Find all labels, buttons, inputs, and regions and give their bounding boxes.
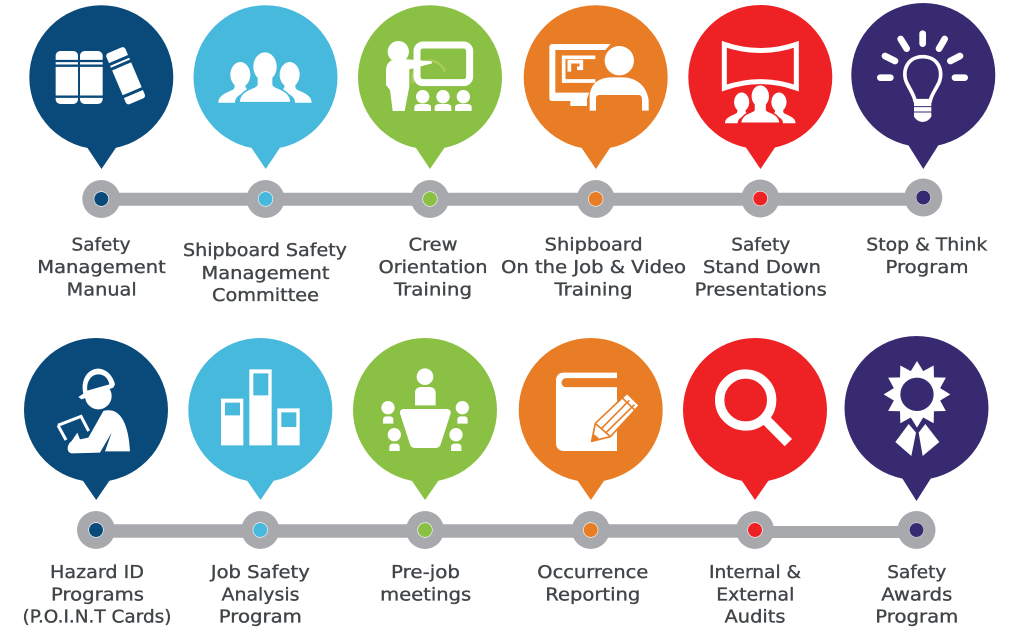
panel: Safety Management Manual <box>29 5 173 301</box>
icon: trainer at board <box>386 41 472 111</box>
timeline node <box>898 511 936 549</box>
timeline node <box>577 180 615 218</box>
pin <box>844 336 988 501</box>
icon: books <box>53 46 147 106</box>
label <box>378 234 488 300</box>
label: Orientation <box>378 257 488 278</box>
label: Awards <box>881 584 952 606</box>
icon: worker with tablet <box>58 369 130 453</box>
label: Job Safety <box>210 562 310 583</box>
label: Shipboard Safety <box>183 240 347 261</box>
label: On the Job & Video <box>501 257 686 278</box>
panel: Occurrence Reporting <box>519 338 663 606</box>
timeline node <box>77 511 115 549</box>
pin <box>688 5 832 169</box>
icon: award rosette <box>884 361 950 456</box>
icon: notebook and pencil <box>556 373 639 451</box>
timeline node <box>406 511 444 549</box>
pin <box>358 5 502 169</box>
label: Program <box>886 257 968 278</box>
pin <box>194 5 338 169</box>
label: Audits <box>724 606 786 628</box>
panel: Crew Orientation Training <box>358 5 502 301</box>
timeline node <box>246 180 284 218</box>
label <box>537 562 648 606</box>
icon: video training <box>549 44 649 111</box>
label <box>709 562 801 628</box>
pin <box>29 5 173 169</box>
timeline node <box>411 180 449 218</box>
label <box>210 562 310 628</box>
label: Program <box>219 606 302 628</box>
timeline node <box>82 180 120 218</box>
pin <box>24 338 168 500</box>
label: Hazard ID <box>50 562 144 583</box>
connector line: bottom row <box>96 524 916 538</box>
label: Management <box>37 257 166 278</box>
panel: Stop & Think Program <box>851 3 995 278</box>
label: Stop & Think <box>866 234 988 256</box>
label: Management <box>202 263 330 284</box>
panel: Safety Awards Program <box>844 336 988 628</box>
pin <box>188 338 332 500</box>
timeline node <box>736 511 774 549</box>
timeline node <box>572 511 610 549</box>
label: Committee <box>212 285 319 306</box>
label: Stand Down <box>703 257 821 278</box>
panel: Job Safety Analysis Program <box>188 338 332 628</box>
icon: meeting table <box>381 368 469 451</box>
label <box>22 562 172 628</box>
pin <box>519 338 663 500</box>
label: (P.O.I.N.T Cards) <box>22 606 172 628</box>
pin <box>683 338 827 500</box>
panel: Safety Stand Down Presentations <box>688 5 832 300</box>
panel: Internal & External Audits <box>683 338 827 628</box>
pin <box>851 3 995 169</box>
audience <box>725 85 796 123</box>
pin <box>524 5 668 169</box>
curved screen <box>724 44 796 88</box>
timeline node <box>904 178 942 216</box>
label <box>37 234 166 300</box>
label: Reporting <box>545 584 640 606</box>
panel: Shipboard Safety Management Committee <box>183 5 347 306</box>
panel: Hazard ID Programs <box>22 338 172 628</box>
label <box>183 240 347 306</box>
label: Safety <box>731 234 790 256</box>
label: Program <box>875 606 958 628</box>
label: Occurrence <box>537 562 648 583</box>
connector line: top row <box>101 193 923 206</box>
timeline node <box>741 180 779 218</box>
label: Safety <box>72 234 130 256</box>
label: Training <box>393 280 472 300</box>
label: Shipboard <box>545 234 643 256</box>
timeline node <box>241 511 279 549</box>
label: Manual <box>67 280 137 300</box>
panel: Shipboard On the Job & Video Training <box>501 5 686 301</box>
label <box>866 234 988 278</box>
icon: magnifying glass <box>720 374 788 443</box>
label <box>695 234 827 300</box>
pin <box>353 338 497 500</box>
label <box>875 562 958 628</box>
label <box>501 234 686 300</box>
icon: bars <box>221 369 300 445</box>
icon: people <box>218 52 312 103</box>
label: External <box>716 584 794 606</box>
icon: light bulb <box>880 34 965 122</box>
label: Analysis <box>222 584 300 606</box>
label: meetings <box>380 584 471 606</box>
label: Pre-job <box>391 562 460 583</box>
label: Presentations <box>695 280 827 300</box>
label <box>380 562 471 606</box>
label: Safety <box>887 562 946 583</box>
label: Crew <box>408 234 458 256</box>
label: Training <box>553 280 632 300</box>
label: Programs <box>51 584 144 606</box>
panel: Pre-job meetings <box>353 338 497 606</box>
icon: screen and audience <box>724 44 796 123</box>
label: Internal & <box>709 562 801 583</box>
